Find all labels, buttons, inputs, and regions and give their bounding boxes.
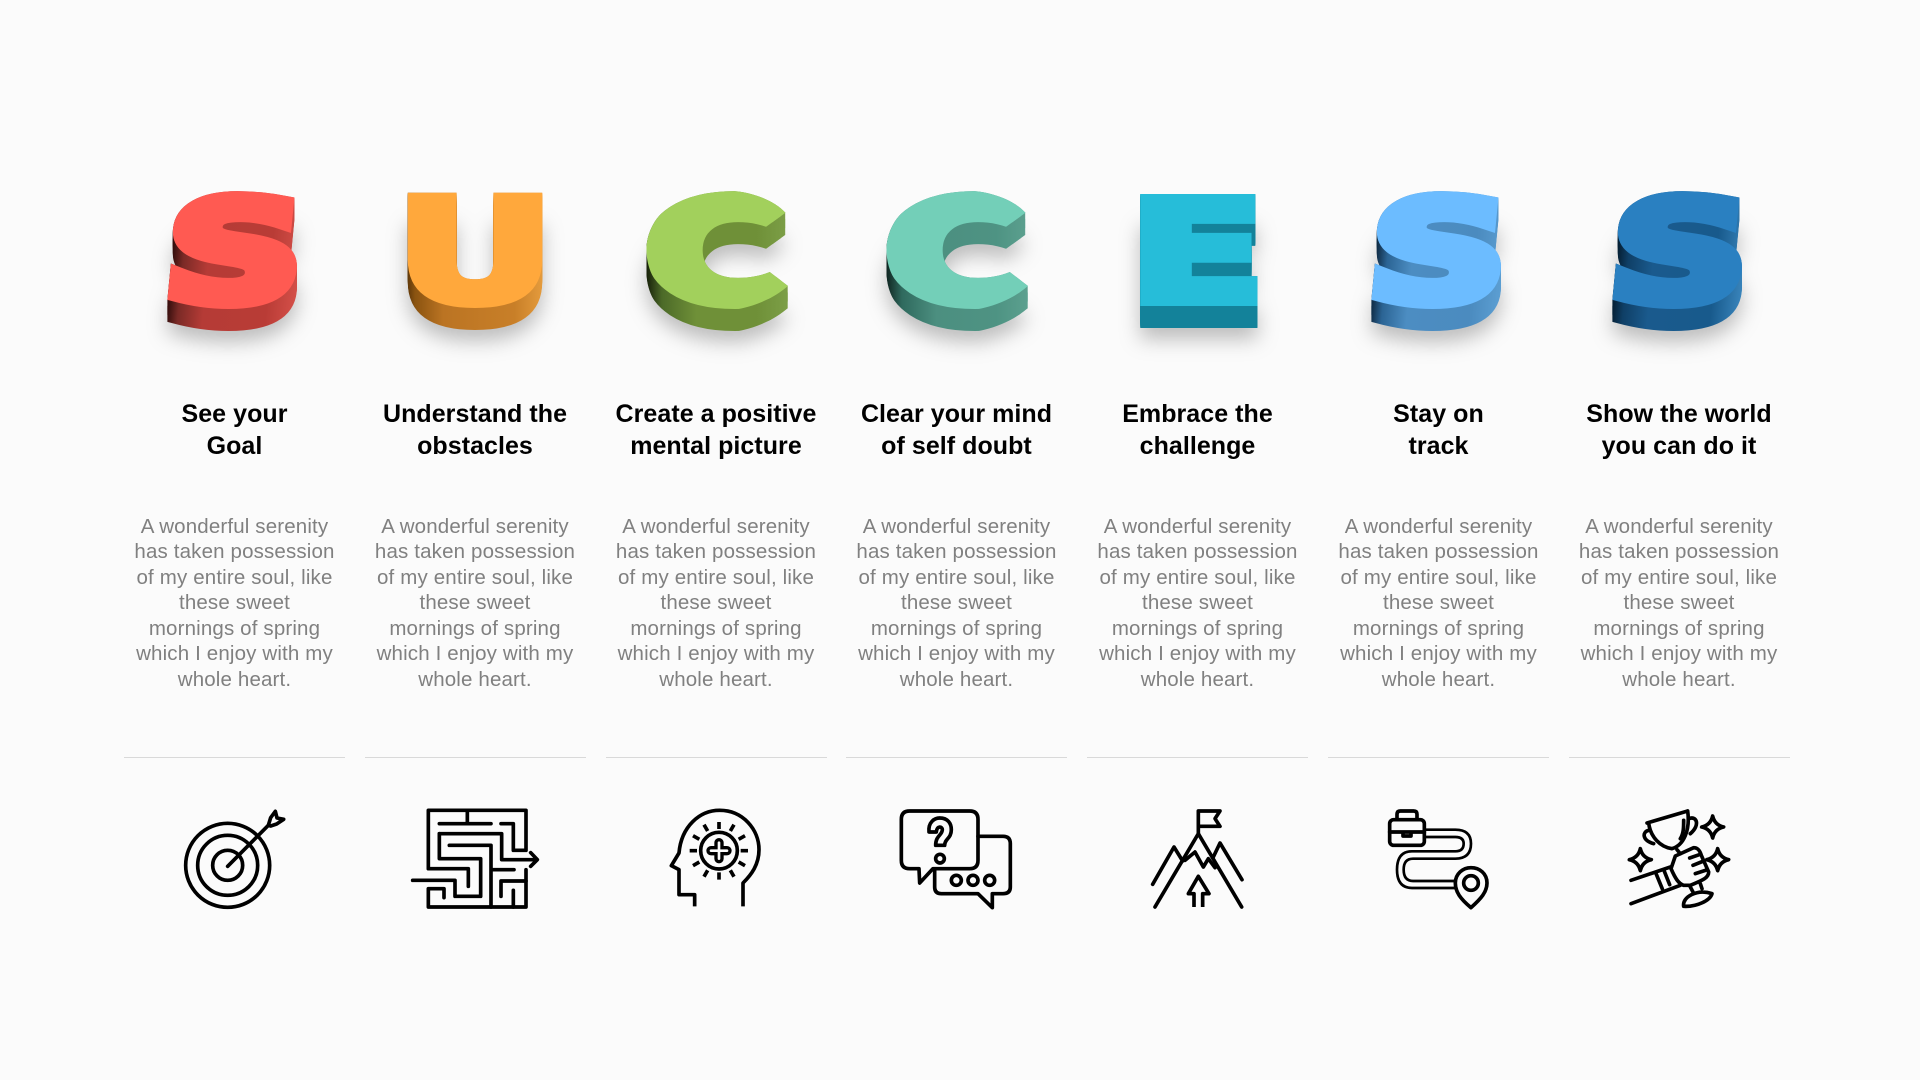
heading [181, 400, 288, 460]
body text [134, 514, 335, 691]
heading: See your [181, 400, 288, 428]
body text: whole heart. [1382, 668, 1495, 691]
panel: C - create a positive mental picture [606, 191, 827, 906]
body text: mornings of spring [389, 617, 561, 640]
panel: S - see your goal [124, 171, 345, 910]
body text: A wonderful serenity [381, 514, 569, 538]
body text: A wonderful serenity [1585, 514, 1773, 538]
icon: mountain with flag [1150, 809, 1244, 909]
body text: whole heart. [1622, 668, 1736, 691]
panel: C - clear your mind of self doubt [846, 191, 1067, 910]
body text: has taken possession [616, 540, 816, 563]
body text: of my entire soul, like [618, 566, 814, 589]
heading: Stay on [1393, 400, 1484, 428]
body text: A wonderful serenity [622, 514, 810, 538]
body text: of my entire soul, like [377, 566, 573, 589]
body text: whole heart. [900, 668, 1013, 691]
3D letter S light blue: S [1361, 171, 1516, 334]
body text [375, 514, 575, 691]
body text: which I enjoy with my [1581, 642, 1777, 665]
heading [1122, 400, 1273, 460]
body text: whole heart. [418, 668, 532, 691]
body text [1579, 514, 1779, 691]
body text: which I enjoy with my [1099, 642, 1296, 665]
body text: these sweet [1623, 591, 1735, 614]
heading [383, 400, 567, 460]
heading: Embrace the [1122, 400, 1273, 428]
body text: of my entire soul, like [858, 566, 1054, 589]
icon: briefcase route to pin [1388, 809, 1489, 910]
icon: head with positive mind [669, 808, 761, 906]
body text: of my entire soul, like [136, 566, 332, 589]
icon: target with arrow [184, 809, 286, 910]
3D letter S red: S [157, 171, 312, 334]
icon: maze [410, 808, 540, 909]
body text: A wonderful serenity [1104, 514, 1291, 538]
body text: mornings of spring [1112, 617, 1283, 640]
heading: of self doubt [881, 432, 1032, 460]
body text: has taken possession [134, 540, 335, 563]
panel: U - understand the obstacles [365, 170, 586, 909]
body text [1338, 514, 1539, 691]
body text: which I enjoy with my [377, 642, 573, 665]
body text: mornings of spring [871, 617, 1042, 640]
body text: of my entire soul, like [1581, 566, 1777, 589]
panel: S - stay on track [1328, 171, 1549, 910]
body text: has taken possession [856, 540, 1057, 563]
heading: Clear your mind [861, 400, 1052, 428]
heading [861, 400, 1052, 460]
heading: you can do it [1602, 432, 1756, 460]
body text: which I enjoy with my [618, 642, 814, 665]
heading: Goal [207, 432, 262, 460]
3D letter E cyan: E [1129, 171, 1265, 334]
heading: track [1408, 432, 1468, 460]
body text: these sweet [179, 591, 290, 614]
body text: has taken possession [1338, 540, 1539, 563]
body text: whole heart. [1141, 668, 1254, 691]
heading: Show the world [1586, 400, 1772, 428]
body text: of my entire soul, like [1340, 566, 1536, 589]
body text: which I enjoy with my [1340, 642, 1537, 665]
body text: mornings of spring [1593, 617, 1765, 640]
heading: Create a positive [616, 400, 816, 428]
body text: mornings of spring [149, 617, 320, 640]
body text: mornings of spring [630, 617, 802, 640]
heading: challenge [1140, 432, 1255, 460]
body text [616, 514, 816, 691]
body text: has taken possession [375, 540, 575, 563]
heading: mental picture [630, 432, 802, 460]
body text: has taken possession [1097, 540, 1298, 563]
body text: these sweet [419, 591, 531, 614]
body text: these sweet [660, 591, 772, 614]
heading: Understand the [383, 400, 567, 428]
icon: chat bubbles with question [900, 809, 1012, 910]
heading [616, 400, 816, 460]
body text: A wonderful serenity [141, 514, 328, 538]
3D letter C teal: C [884, 172, 1034, 335]
body text: which I enjoy with my [136, 642, 333, 665]
heading [1586, 400, 1772, 460]
body text [856, 514, 1057, 691]
body text: A wonderful serenity [863, 514, 1050, 538]
heading: obstacles [417, 432, 533, 460]
body text: whole heart. [659, 668, 773, 691]
body text: which I enjoy with my [858, 642, 1055, 665]
body text [1097, 514, 1298, 691]
body text: whole heart. [178, 668, 291, 691]
body text: these sweet [1142, 591, 1253, 614]
body text: has taken possession [1579, 540, 1779, 563]
heading [1393, 400, 1484, 460]
3D letter C green: C [643, 172, 794, 335]
body text: A wonderful serenity [1345, 514, 1532, 538]
icon: hand holding trophy [1628, 809, 1730, 908]
panel: S - show the world you can do it [1569, 171, 1790, 908]
body text: these sweet [901, 591, 1012, 614]
3D letter S dark blue: S [1602, 171, 1757, 334]
3D letter U orange: U [396, 170, 553, 336]
body text: mornings of spring [1353, 617, 1524, 640]
panel: E - embrace the challenge [1087, 171, 1308, 909]
body text: these sweet [1383, 591, 1494, 614]
body text: of my entire soul, like [1100, 566, 1296, 589]
